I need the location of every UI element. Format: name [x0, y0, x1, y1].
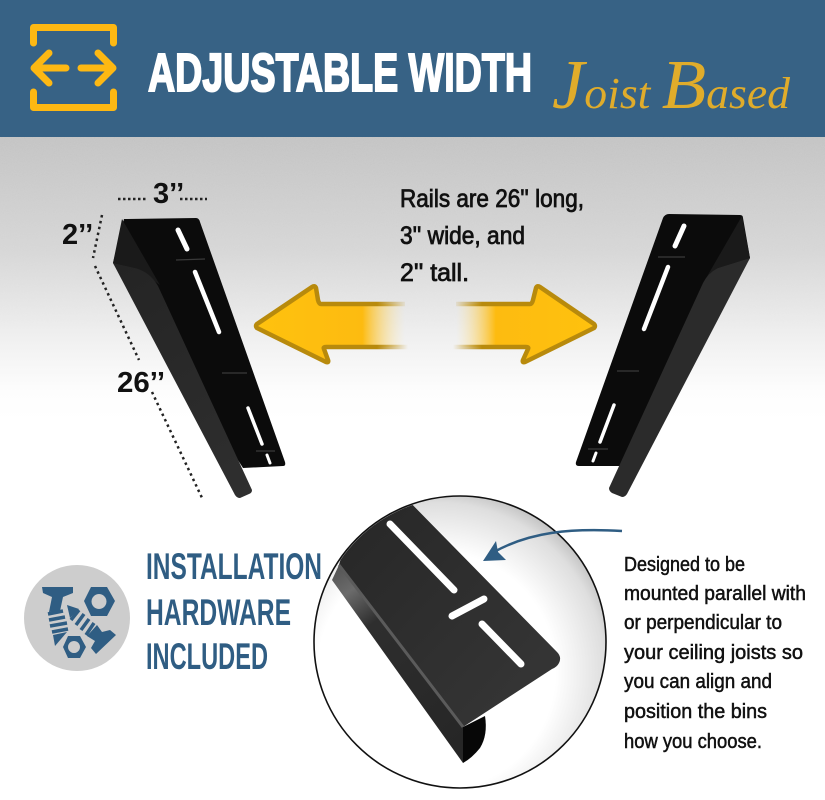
- icon: adjustable width brackets and arrows: [34, 28, 114, 108]
- dimension: 26 inch length: [95, 266, 203, 500]
- bracket top plate: [339, 490, 560, 727]
- mounting description text: or perpendicular to: [624, 612, 782, 634]
- mounting description text: Designed to be: [624, 554, 745, 576]
- installation hardware heading: HARDWARE: [146, 592, 291, 633]
- dimension: 2 inch height: 2’’: [62, 219, 93, 251]
- dimension: 26 inch length: 26’’: [117, 367, 165, 399]
- left rail: [113, 218, 285, 498]
- rails description text: 3'' wide, and: [400, 222, 525, 250]
- bracket side face: [332, 565, 463, 763]
- rail flange: [113, 263, 252, 498]
- rail slots: [593, 226, 684, 461]
- bracket fold highlight: [339, 565, 463, 727]
- icon: screw diagonal: [67, 605, 116, 654]
- dimension: 3 inch width: 3’’: [153, 178, 184, 210]
- icon circle: [24, 565, 130, 671]
- installation hardware heading: INSTALLATION: [146, 546, 322, 587]
- dimension: 3 inch width: [118, 178, 207, 210]
- mounting description text: how you choose.: [624, 731, 762, 753]
- gray gradient background: [0, 137, 825, 420]
- rails description text: Rails are 26'' long,: [400, 185, 584, 213]
- bracket close-up: [332, 490, 560, 763]
- subtitle script: Joist Based: [552, 47, 791, 124]
- rail flange: [609, 258, 750, 497]
- mounting description text: you can align and: [624, 671, 772, 693]
- icon: screw vertical: [42, 587, 73, 646]
- icon: large nut: [84, 587, 115, 616]
- rails description text: 2'' tall.: [400, 259, 469, 287]
- mounting description text: [624, 554, 806, 753]
- dimension: 2 inch height: [62, 215, 102, 258]
- inner shadow of bracket: [463, 716, 486, 763]
- detail lens circle: [314, 490, 606, 788]
- pointer arrow: [483, 530, 622, 561]
- rails description text: [400, 185, 584, 287]
- header banner: [0, 0, 825, 137]
- mounting description text: position the bins: [624, 701, 767, 723]
- rail back plate: [113, 218, 285, 468]
- title: ADJUSTABLE WIDTH: [148, 43, 532, 103]
- installation hardware heading: [146, 546, 322, 677]
- right rail: [576, 214, 750, 497]
- arrow: right: [453, 286, 595, 362]
- mounting description text: your ceiling joists so: [624, 642, 803, 664]
- arrow: left: [256, 286, 408, 362]
- hardware icon: [24, 565, 130, 671]
- dimension labels left rail: [62, 178, 207, 500]
- mounting description text: mounted parallel with: [624, 583, 806, 605]
- installation hardware heading: INCLUDED: [146, 636, 268, 677]
- rail back plate: [576, 214, 750, 466]
- rail slots: [178, 230, 270, 463]
- icon: small nut: [63, 636, 86, 658]
- plate slots: [390, 524, 521, 664]
